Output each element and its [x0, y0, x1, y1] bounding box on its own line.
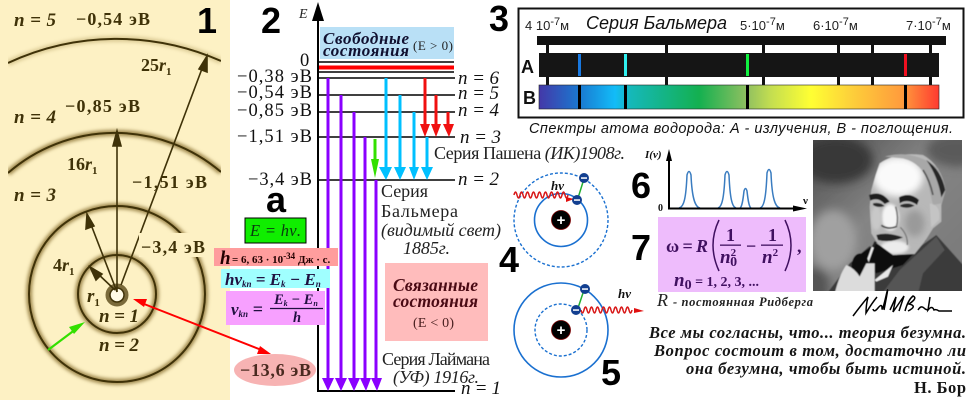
emission spectrum A — [521, 53, 939, 77]
Rydberg formula box: 2 — [731, 247, 737, 259]
wavelength scale labels: 7·10 — [906, 18, 932, 33]
absorption spectrum B — [523, 85, 939, 109]
Rydberg formula box: 1 — [768, 225, 777, 245]
wavelength scale labels: м — [942, 18, 951, 33]
energy values: −0,85 эВ — [237, 101, 312, 121]
quantum number labels: n = 1 — [461, 378, 501, 399]
formula frequency: − E — [288, 292, 314, 308]
orbit labels: levels and radii: −0,54 эВ — [76, 9, 150, 29]
Rydberg formula box: 2 — [773, 247, 779, 259]
orbit labels: levels and radii: 1 — [166, 66, 172, 78]
orbit labels: levels and radii: n = 5 — [14, 10, 56, 31]
panel 1: orbit diagram background — [0, 0, 230, 400]
formula frequency: = — [248, 299, 263, 319]
orbit labels: levels and radii: 1 — [92, 165, 98, 177]
bound states box: Связанные — [393, 275, 478, 295]
series captions: Бальмера — [381, 201, 458, 221]
formula energy difference — [221, 269, 330, 289]
Bohr quote: Все мы согласны, что... теория безумна. — [648, 323, 966, 342]
orbit labels: levels and radii: −0,85 эВ — [65, 96, 140, 116]
heading number 2: 2 — [261, 0, 281, 41]
formula frequency: E — [274, 292, 284, 308]
wavelength scale labels: 6·10 — [813, 18, 839, 33]
Rydberg formula box: 0 — [685, 278, 692, 293]
Bohr quote: Вопрос состоит в том, достаточно ли — [653, 341, 966, 360]
heading number 4: 4 — [499, 239, 519, 280]
atom diagram 5: emission: hν — [618, 286, 631, 301]
spectrum caption: Спектры атома водорода: А - излучения, В - поглощения. — [529, 121, 953, 137]
ground state energy callout — [133, 299, 316, 386]
formula E = hv: E = hν. — [249, 221, 301, 240]
Bohr quote — [648, 323, 966, 397]
orbit rings — [8, 39, 221, 382]
wavelength scale labels: 5·10 — [740, 18, 766, 33]
energy level diagram — [237, 2, 625, 399]
atom diagram 5: emission — [514, 283, 644, 377]
section a: formulas — [214, 179, 338, 326]
intensity chart: 0 — [658, 203, 663, 214]
heading number 7: 7 — [631, 227, 651, 268]
Rydberg formula box — [658, 217, 806, 293]
atom diagram 4: absorption — [514, 173, 608, 267]
scale bar and ticks — [537, 36, 946, 85]
atom diagram 4: absorption: + — [557, 212, 566, 229]
Rydberg formula box: ω = R — [666, 236, 708, 256]
panel 3: Balmer spectrum — [518, 8, 964, 118]
energy values: −0,38 эВ — [237, 67, 312, 87]
formula energy difference: n — [316, 279, 321, 289]
Bohr quote: она безумна, чтобы быть истиной. — [686, 359, 966, 378]
formula frequency: h — [293, 310, 301, 326]
orbit labels: levels and radii: 25r — [141, 55, 166, 75]
Bohr quote: Н. Бор — [914, 378, 966, 397]
orbit labels: levels and radii — [14, 9, 207, 356]
quantum number labels — [458, 68, 501, 399]
Paschen series arrows — [420, 78, 454, 137]
energy values: 0 — [300, 51, 309, 71]
free states box: (E > 0) — [413, 38, 453, 53]
intensity chart: I(ν) — [644, 149, 662, 161]
orbit labels: levels and radii: n = 4 — [14, 107, 56, 128]
wavelength scale labels: -7 — [932, 16, 942, 28]
energy values — [237, 51, 312, 190]
orbit labels: levels and radii: n = 3 — [14, 185, 56, 206]
orbit labels: levels and radii: −3,4 эВ — [141, 237, 205, 257]
series captions: (видимый свет) — [381, 220, 501, 241]
quantum number labels: n = 2 — [458, 169, 500, 190]
Rydberg formula box: 1 — [726, 225, 735, 245]
energy values: −0,54 эВ — [237, 83, 312, 103]
intensity chart: ν — [802, 195, 808, 207]
Rydberg formula box: n — [674, 270, 685, 291]
formula energy difference: kn — [242, 279, 252, 289]
formula Planck constant: = 6, 63 · 10 — [232, 254, 283, 266]
free states box — [320, 27, 454, 60]
Rydberg formula box: n — [762, 247, 773, 268]
Bohr signature — [853, 290, 952, 316]
wavelength scale labels: 4 10 — [525, 18, 550, 33]
Lyman series arrows — [322, 78, 382, 391]
wavelength scale labels: м — [849, 18, 858, 33]
series captions — [381, 143, 625, 388]
orbit labels: levels and radii: n = 1 — [99, 306, 139, 327]
wavelength scale labels — [525, 13, 951, 33]
formula energy difference: k — [281, 279, 286, 289]
orbit labels: levels and radii: 16r — [67, 154, 92, 174]
atom diagram 5: emission: + — [557, 322, 566, 339]
heading number 6: 6 — [631, 165, 651, 206]
Rydberg constant note — [656, 290, 813, 310]
intensity chart — [644, 149, 808, 214]
energy values: −3,4 эВ — [248, 170, 312, 190]
orbit labels: levels and radii: 1 — [69, 266, 75, 278]
Rydberg formula box: − — [746, 236, 756, 256]
atom diagram 4: absorption: hν — [551, 178, 564, 193]
Rydberg formula box: , — [797, 236, 802, 256]
emission spectrum A: A — [521, 57, 534, 77]
Rydberg constant note: - постоянная Ридберга — [673, 295, 813, 309]
formula energy difference: = E — [252, 270, 281, 289]
Rydberg formula box: n — [720, 247, 731, 268]
formula energy difference: − E — [286, 270, 316, 289]
ground state energy callout: −13,6 эВ — [240, 360, 311, 380]
formula Planck constant: Дж · с. — [295, 254, 331, 266]
series captions: 1885г. — [403, 238, 450, 258]
formula frequency: n — [313, 299, 318, 308]
wavelength scale labels: -7 — [550, 16, 560, 28]
wavelength scale labels: -7 — [839, 16, 849, 28]
energy values: −1,51 эВ — [237, 127, 312, 147]
energy axis — [298, 2, 324, 392]
orbit labels: levels and radii: 4r — [53, 255, 69, 275]
quantum number labels: n = 4 — [458, 100, 500, 121]
wavelength scale labels: м — [560, 18, 569, 33]
formula E = hv — [245, 218, 306, 243]
green transition arrow — [48, 322, 85, 350]
heading number 5: 5 — [601, 352, 621, 393]
formula Planck constant: -34 — [283, 251, 296, 261]
formula energy difference: hν — [225, 270, 242, 289]
wavelength scale labels: Серия Бальмера — [586, 13, 727, 33]
formula frequency — [226, 291, 325, 326]
quantum number labels: n = 5 — [458, 83, 499, 104]
series captions: (УФ) 1916г. — [393, 367, 479, 388]
formula Planck constant: h — [220, 248, 231, 269]
quantum number labels: n = 3 — [460, 127, 501, 148]
formula frequency: k — [284, 299, 288, 308]
orbit labels: levels and radii: n = 2 — [99, 335, 140, 356]
heading number 1: 1 — [197, 0, 217, 41]
energy levels — [317, 62, 455, 391]
formula Planck constant — [214, 248, 338, 269]
energy axis: E — [298, 7, 308, 22]
quantum number labels: n = 6 — [458, 68, 500, 89]
absorption spectrum B: B — [523, 88, 536, 108]
bound states box: состояния — [393, 291, 478, 311]
series captions: Серия Лаймана — [382, 349, 490, 369]
Rydberg formula box: = 1, 2, 3, ... — [692, 275, 759, 290]
Balmer series arrows — [379, 78, 433, 180]
series captions: Серия — [381, 181, 428, 201]
wavelength scale labels: м — [776, 18, 785, 33]
Rydberg constant note: R — [656, 290, 668, 310]
portrait photo of Niels Bohr — [813, 140, 962, 291]
bound states box — [385, 263, 488, 341]
green arrow n=3 to n=2 — [371, 139, 379, 178]
free states box: состояния — [323, 41, 409, 60]
Rydberg formula box: 0 — [730, 255, 737, 270]
formula frequency: ν — [231, 300, 239, 319]
orbit labels: levels and radii: 1 — [94, 297, 100, 309]
free states box: Свободные — [323, 29, 409, 48]
orbit labels: levels and radii: −1,51 эВ — [132, 172, 207, 192]
wavelength scale labels: -7 — [766, 16, 776, 28]
series captions: Серия Пашена (ИК)1908г. — [434, 143, 625, 164]
orbit labels: levels and radii: r — [87, 286, 94, 307]
formula frequency: kn — [239, 309, 248, 319]
label a: a — [266, 179, 287, 220]
orbit radius arrows — [86, 56, 207, 292]
bound states box: (E < 0) — [413, 316, 454, 331]
